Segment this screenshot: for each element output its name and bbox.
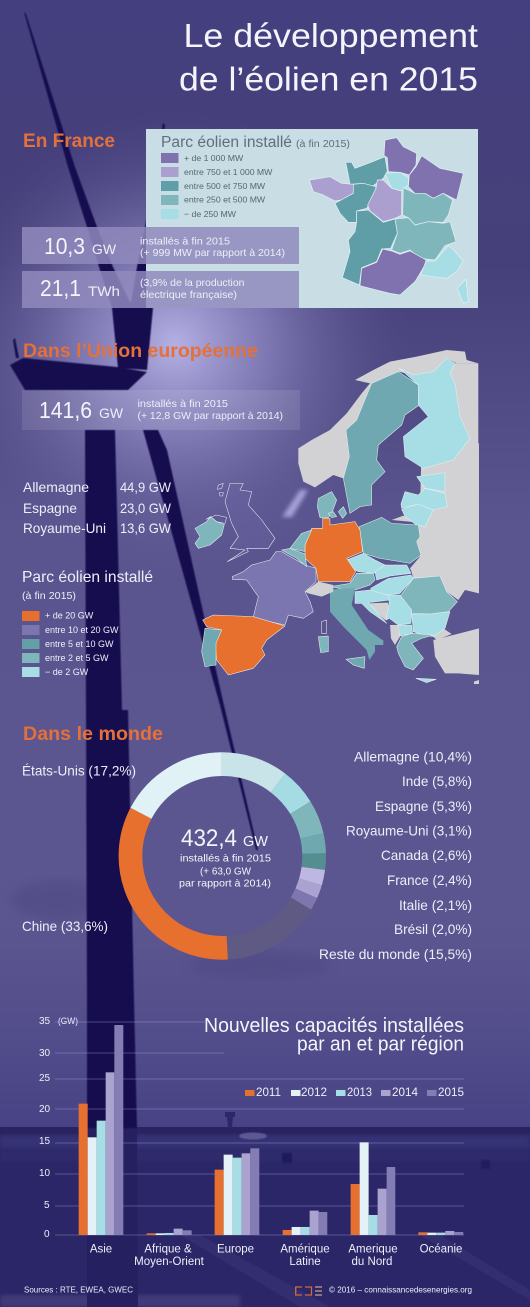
donut centre text: 432,4	[181, 825, 237, 852]
chart title: Nouvelles capacités installées	[204, 1014, 464, 1037]
EU legend: Parc éolien installé	[22, 569, 153, 586]
EU top countries list: Espagne	[23, 500, 77, 516]
chart legend: 2015	[438, 1085, 464, 1099]
logo: CDE	[296, 1287, 322, 1295]
donut centre text: GW	[243, 833, 269, 850]
labels: right donut countries: Espagne (5,3%)	[375, 798, 472, 814]
copyright: © 2016 – connaissancedesenergies.org	[329, 1285, 472, 1295]
x axis labels	[90, 1244, 462, 1268]
y axis labels: 10	[39, 1168, 51, 1179]
sources: Sources : RTE, EWEA, GWEC	[24, 1285, 133, 1295]
donut centre text: (+ 63,0 GW	[200, 866, 251, 878]
France legend: entre 500 et 750 MW	[184, 181, 266, 191]
stat: 141,6 GW: (+ 12,8 GW par rapport à 2014)	[138, 410, 283, 422]
y axis labels: 20	[39, 1104, 51, 1115]
France legend: + de 1 000 MW	[184, 153, 244, 163]
x axis labels: Asie	[90, 1244, 112, 1256]
EU legend	[22, 569, 153, 677]
EU top countries list: Allemagne	[23, 479, 89, 495]
donut centre text: par rapport à 2014)	[179, 878, 271, 890]
bar chart: new capacity by region	[39, 1016, 464, 1268]
stat: 21,1 TWh: TWh	[88, 283, 120, 299]
y axis labels: 25	[39, 1073, 51, 1084]
y axis labels: 15	[39, 1136, 51, 1147]
chart legend: 2013	[347, 1085, 372, 1099]
panel: France map	[146, 129, 478, 308]
chart title: par an et par région	[297, 1033, 464, 1056]
map heading	[161, 134, 350, 151]
EU legend: entre 5 et 10 GW	[45, 639, 114, 649]
chart title	[204, 1014, 464, 1056]
EU top countries list: 44,9 GW	[120, 479, 172, 495]
x axis labels: Afrique &	[144, 1244, 192, 1256]
EU legend: entre 10 et 20 GW	[45, 625, 119, 635]
France regions map	[309, 138, 468, 303]
bars: Océanie	[418, 1231, 463, 1235]
y axis labels	[39, 1016, 78, 1240]
y axis labels: (GW)	[58, 1016, 78, 1026]
EU legend: (à fin 2015)	[22, 590, 76, 602]
y axis labels: 30	[39, 1048, 51, 1059]
x axis labels: Amérique	[280, 1244, 330, 1256]
donut centre text: installés à fin 2015	[180, 853, 271, 865]
x axis labels: du Nord	[352, 1256, 392, 1268]
stat: 141,6 GW: GW	[99, 405, 124, 421]
stat: 21,1 TWh: électrique française)	[140, 289, 237, 301]
labels: right donut countries: Inde (5,8%)	[402, 773, 472, 789]
heading: En France: En France	[23, 131, 115, 152]
y axis labels: 35	[39, 1016, 51, 1027]
title	[179, 17, 478, 98]
bars: Amérique Latine	[283, 1211, 327, 1235]
stat: 141,6 GW: installés à fin 2015	[138, 398, 228, 410]
x axis labels: Moyen-Orient	[134, 1256, 205, 1268]
labels: right donut countries: France (2,4%)	[387, 872, 472, 888]
ground	[0, 1112, 530, 1307]
labels: right donut countries: Allemagne (10,4%)	[354, 749, 472, 765]
EU legend: entre 2 et 5 GW	[45, 653, 109, 663]
EU top countries list	[23, 479, 172, 536]
bars: Asie	[79, 1025, 123, 1235]
labels: right donut countries	[319, 749, 472, 962]
chart legend: 2012	[301, 1085, 327, 1099]
stat: 10,3 GW: (+ 999 MW par rapport à 2014)	[140, 247, 285, 259]
EU legend: + de 20 GW	[45, 611, 94, 621]
x axis labels: Océanie	[420, 1244, 462, 1256]
stat: 141,6 GW: 141,6	[39, 397, 92, 423]
stat: 21,1 TWh	[22, 271, 299, 308]
EU top countries list: 13,6 GW	[120, 520, 172, 536]
labels: right donut countries: Brésil (2,0%)	[394, 921, 472, 937]
heading: Dans le monde: Dans le monde	[23, 724, 163, 745]
labels: right donut countries: Royaume-Uni (3,1%)	[346, 823, 472, 839]
donut centre text	[179, 825, 271, 890]
labels: right donut countries: Reste du monde (15,5%)	[319, 946, 472, 962]
chart legend: 2011	[256, 1085, 281, 1099]
map: Europe	[195, 350, 479, 684]
France legend: entre 750 et 1 000 MW	[184, 167, 273, 177]
labels: left donut countries: Chine (33,6%)	[22, 918, 108, 934]
heading: Dans l'Union européenne: Dans l’Union européenne	[23, 341, 258, 362]
donut chart	[130, 764, 314, 948]
France legend: − de 250 MW	[184, 209, 237, 219]
chart legend: 2014	[392, 1085, 418, 1099]
stat: 10,3 GW: GW	[92, 241, 117, 257]
stat: 10,3 GW: installés à fin 2015	[140, 235, 230, 247]
stat: 21,1 TWh: (3,9% de la production	[140, 277, 245, 289]
title: de l’éolien en 2015	[179, 60, 478, 98]
bars: Amérique du Nord	[351, 1142, 395, 1235]
turbine lower tower in shadow	[87, 1127, 138, 1307]
labels: left donut countries	[22, 763, 136, 934]
stat: 10,3 GW	[22, 227, 299, 264]
labels: right donut countries: Italie (2,1%)	[399, 897, 472, 913]
x axis labels: Europe	[217, 1244, 254, 1256]
chart legend	[245, 1085, 464, 1099]
y axis labels: 5	[44, 1200, 50, 1211]
stat: 141,6 GW	[22, 390, 300, 430]
x axis labels: Amerique	[348, 1244, 398, 1256]
stat: 10,3 GW: 10,3	[44, 233, 85, 259]
EU legend: − de 2 GW	[45, 667, 89, 677]
stat: 21,1 TWh: 21,1	[40, 275, 81, 301]
labels: left donut countries: États-Unis (17,2%)	[22, 763, 136, 779]
France legend: entre 250 et 500 MW	[184, 194, 266, 204]
x axis labels: Latine	[289, 1256, 321, 1268]
map heading: (à fin 2015)	[296, 139, 350, 150]
EU top countries list: Royaume-Uni	[23, 520, 106, 536]
bars: Europe	[215, 1148, 259, 1235]
France legend	[161, 153, 273, 219]
map heading: Parc éolien installé	[161, 134, 292, 151]
y axis labels: 0	[44, 1229, 50, 1240]
labels: right donut countries: Canada (2,6%)	[381, 847, 472, 863]
bars: Afrique et Moyen-Orient	[147, 1229, 192, 1235]
title: Le développement	[184, 17, 478, 54]
EU top countries list: 23,0 GW	[120, 500, 172, 516]
